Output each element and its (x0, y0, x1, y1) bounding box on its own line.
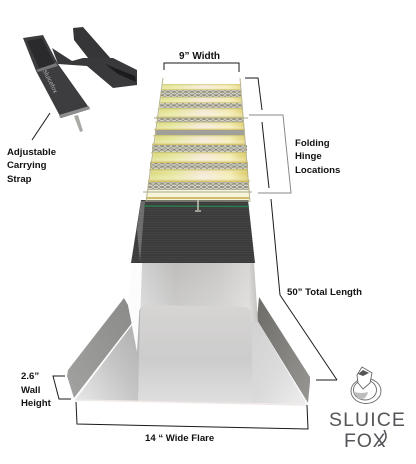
bracket: 9 inch width (164, 63, 239, 72)
label: wall height: Wall (21, 385, 40, 396)
ribbed mat (131, 200, 255, 263)
bracket: folding hinge locations (249, 115, 291, 193)
bracket: wall height (53, 376, 71, 399)
left flare wall (67, 298, 132, 398)
right flare wall (257, 297, 310, 403)
bracket: wide flare (76, 402, 308, 429)
label: adjustable carrying strap: Strap (7, 174, 32, 185)
line: total length dimension (245, 78, 337, 380)
label: wide flare: 14 “ Wide Flare (145, 433, 214, 444)
label: folding hinge locations: Hinge (295, 151, 322, 162)
riffle plates (147, 84, 250, 200)
label: 9 inch width: 9” Width (179, 51, 220, 62)
logo: sluice fox (329, 367, 406, 452)
hinge pins (143, 118, 252, 192)
flare floor left (75, 305, 142, 401)
icon: fox mark (351, 367, 381, 404)
floor front edge (75, 400, 307, 405)
arrow: strap pointer line (32, 113, 50, 140)
upper pan (140, 263, 258, 322)
label: wall height: 2.6” (21, 371, 39, 382)
logo wordmark: SLUICE (329, 409, 406, 431)
icon: carrying strap (23, 27, 137, 132)
label: adjustable carrying strap: Adjustable (7, 147, 56, 158)
label: folding hinge locations: Locations (295, 165, 340, 176)
center floor panel (138, 305, 253, 403)
label: adjustable carrying strap: Carrying (7, 160, 47, 171)
strap buckle (74, 115, 83, 132)
expanded mesh bands (161, 90, 241, 97)
label: folding hinge locations: Folding (295, 138, 330, 149)
logo: sluice fox: FOX (344, 430, 386, 452)
white wedge (128, 263, 142, 352)
label: wall height: Height (21, 398, 52, 409)
side rails (146, 78, 250, 202)
flare floor right (245, 307, 307, 404)
strap logo text: sluicefox (41, 69, 59, 95)
sluice box (67, 78, 310, 405)
logo tail flourish (378, 430, 386, 446)
label: total length: 50” Total Length (287, 287, 362, 298)
